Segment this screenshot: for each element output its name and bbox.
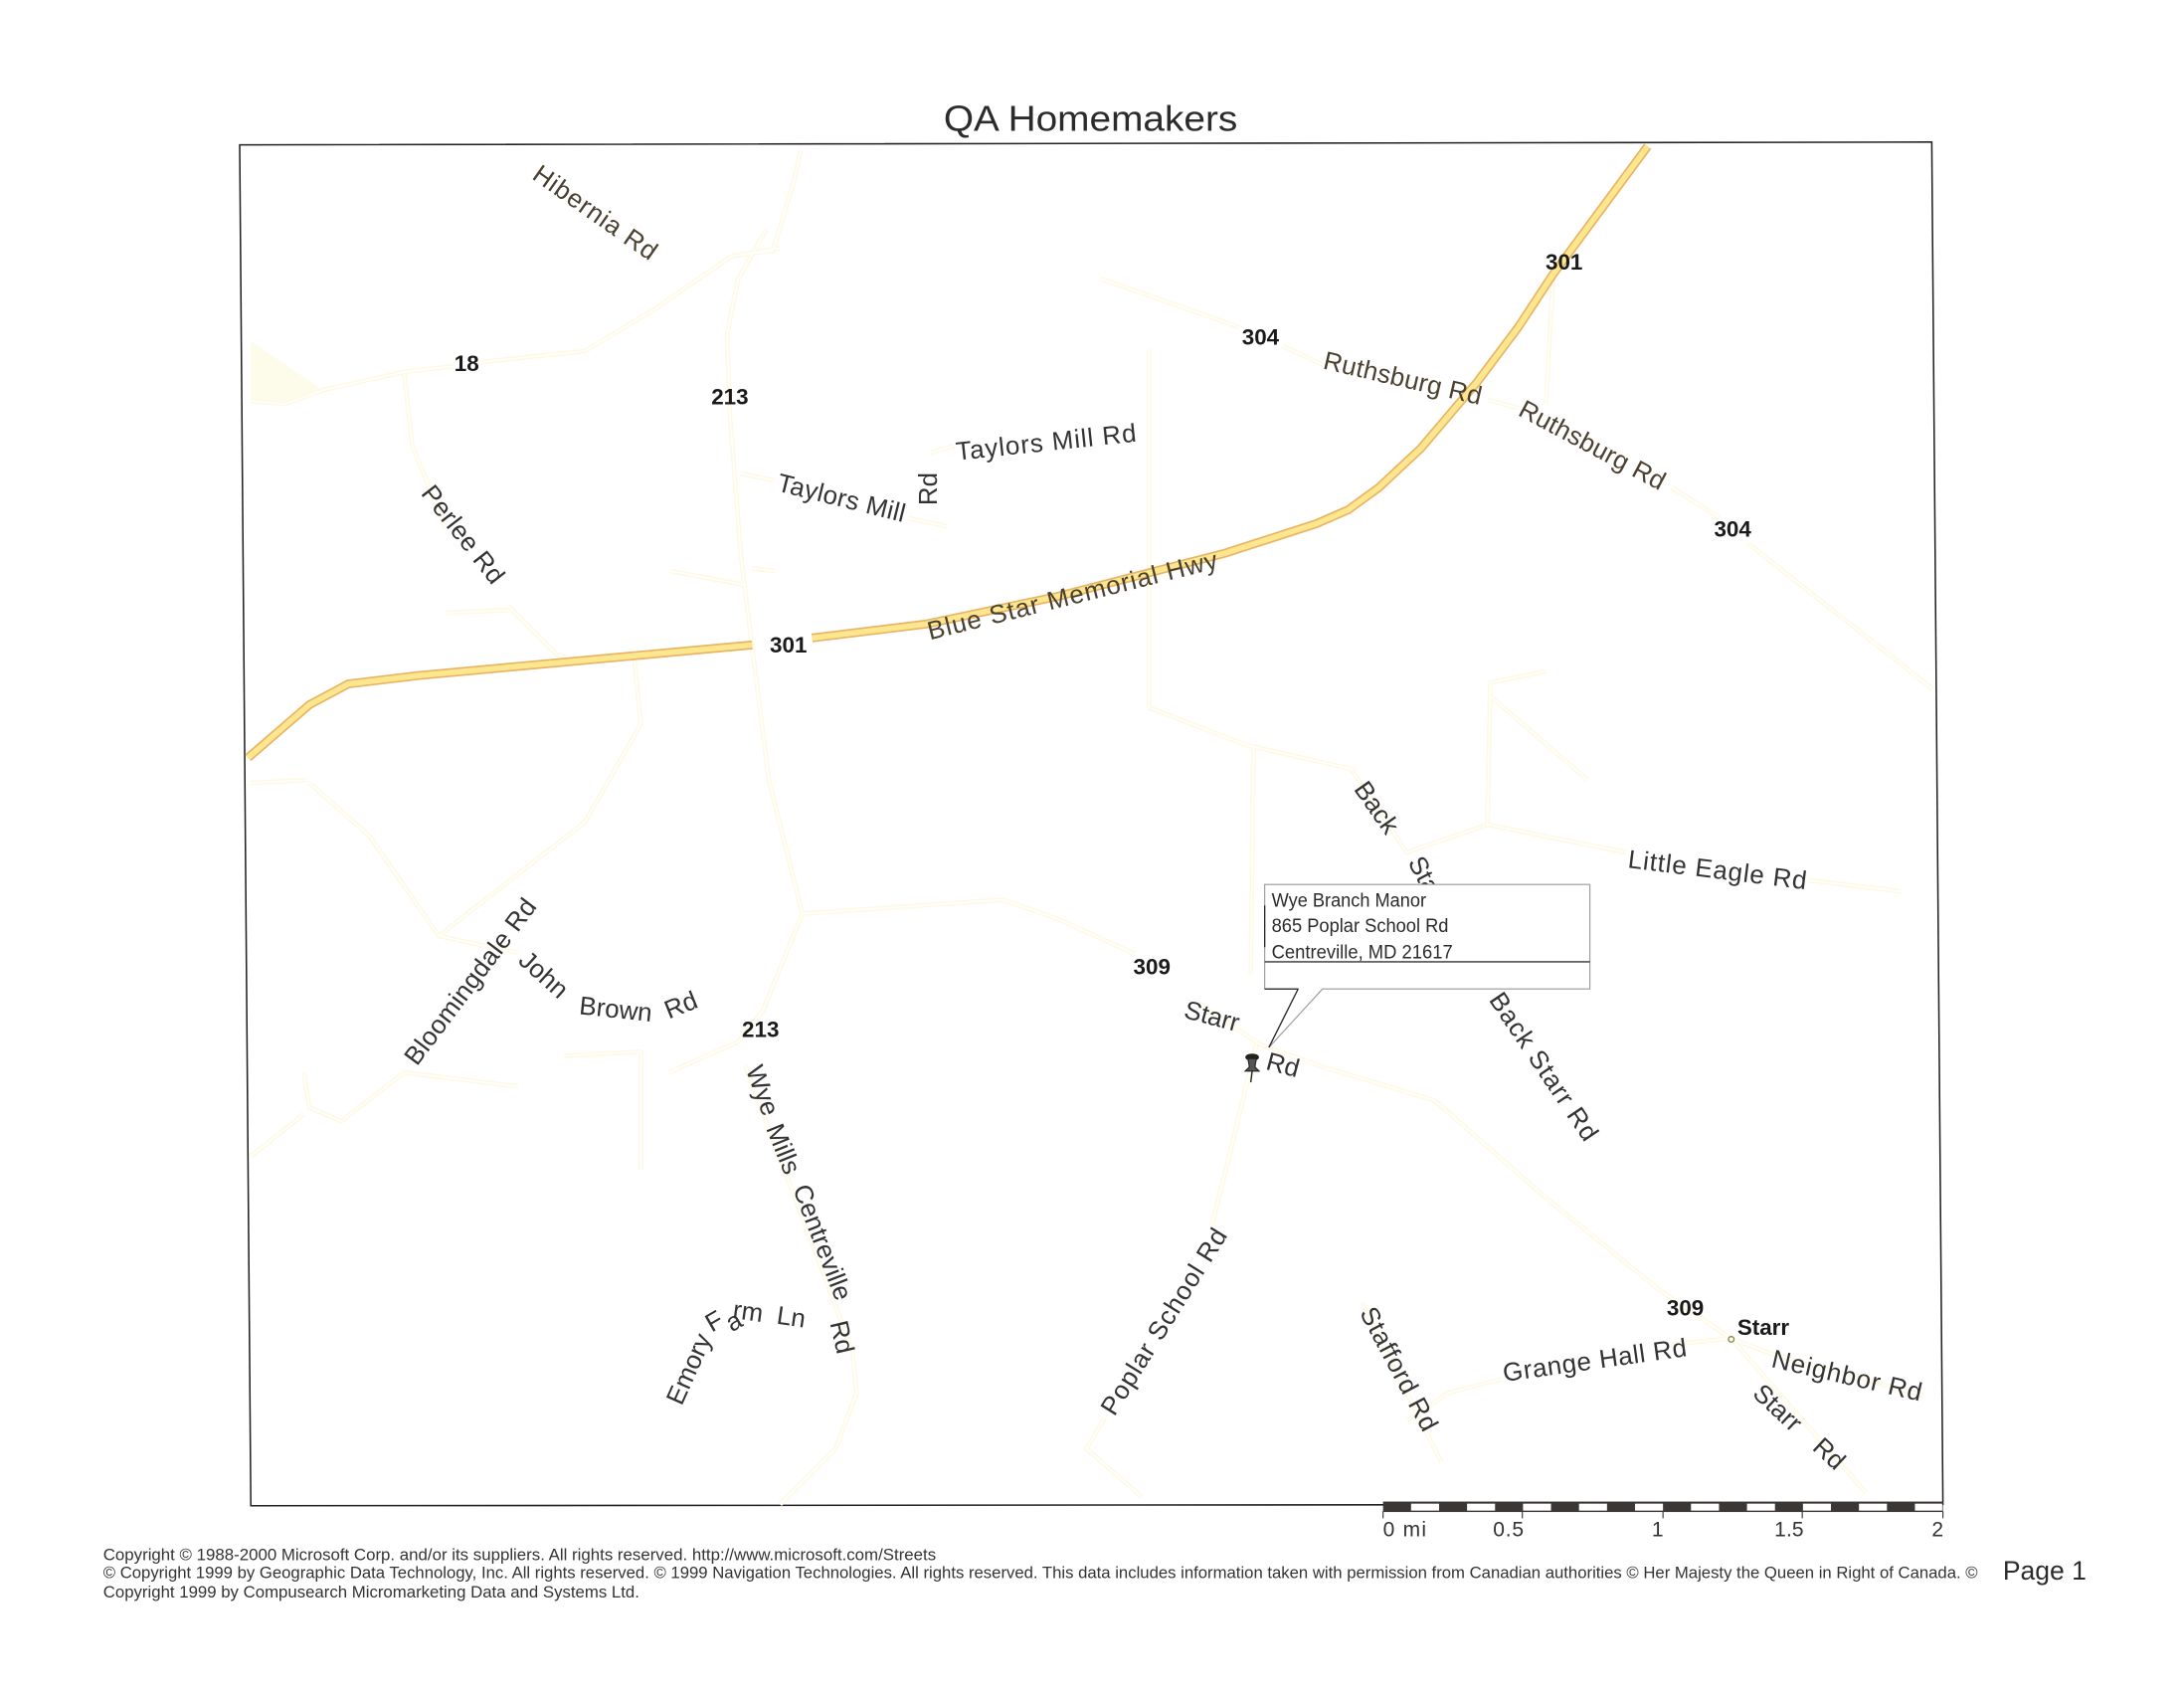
route 213 south: 213 xyxy=(742,1017,779,1041)
road label: Grange Hall Rd: Grange Hall Rd xyxy=(1501,1334,1689,1388)
road label: Taylors Mill: Taylors Mill xyxy=(775,470,908,528)
road label: Emory Farm Ln: rm xyxy=(731,1296,765,1328)
map frame xyxy=(240,142,1943,1506)
road label: Wye Mills Centreville Rd: Centreville xyxy=(787,1181,856,1304)
road label: Neighbor Rd: Neighbor Rd xyxy=(1769,1346,1924,1407)
road label: Wye Mills Centreville Rd: Rd xyxy=(824,1318,858,1357)
road label: Taylors Mill Rd: Taylors Mill Rd xyxy=(955,420,1138,467)
route 213 north: 213 xyxy=(711,385,749,410)
road label: Wye Mills Centreville Rd xyxy=(740,1061,858,1357)
callout: Wye Branch Manor: 865 Poplar School Rd xyxy=(1272,915,1448,937)
copyright notice: Copyright © 1988-2000 Microsoft Corp. and/or its suppliers. All rights reserved. http://www.microsoft.com/Streets xyxy=(103,1545,936,1564)
road label: Brown: Brown xyxy=(578,992,653,1028)
copyright notice: Copyright 1999 by Compusearch Micromarketing Data and Systems Ltd. xyxy=(103,1583,639,1601)
road label: Starr behind callout: Starr xyxy=(1402,851,1453,914)
route 304: 304 xyxy=(1242,324,1280,349)
road label: Rd vertical: Rd xyxy=(915,472,943,505)
road label: Starr: Starr xyxy=(1182,996,1243,1037)
road label: Bloomingdale Rd: Bloomingdale Rd xyxy=(400,893,542,1070)
highway 301 xyxy=(248,146,1648,758)
scale bar: 1 xyxy=(1652,1519,1664,1542)
scale bar: 2 xyxy=(1931,1519,1943,1542)
road label: Ruthsburg Rd west: Ruthsburg Rd xyxy=(1321,347,1485,411)
road label: Wye Mills Centreville Rd: Wye xyxy=(740,1061,784,1119)
road label: Emory Farm Ln: Ln xyxy=(775,1302,808,1334)
road label: Wye Mills Centreville Rd: Mills xyxy=(760,1120,806,1179)
scale bar: 0 mi xyxy=(1383,1519,1426,1542)
callout: Wye Branch Manor: Centreville, MD 21617 xyxy=(1272,941,1453,963)
road label: Rd: Rd xyxy=(1807,1432,1850,1475)
road label: Perlee Rd: Perlee Rd xyxy=(416,480,509,590)
callout: Wye Branch Manor: Wye Branch Manor xyxy=(1272,890,1427,912)
road label: Back: Back xyxy=(1349,777,1404,840)
route 309: 309 xyxy=(1134,954,1171,979)
scale bar: 0.5 xyxy=(1493,1519,1524,1542)
road label: Emory Farm Ln: Emory xyxy=(661,1330,717,1409)
road label: Starr: Starr xyxy=(1747,1379,1807,1437)
copyright notice: © Copyright 1999 by Geographic Data Technology, Inc. All rights reserved. © 1999 Navigation Technologies. All rights reserved. This data includes information taken with permission from Canadian authorities © Her Majesty the Queen in Right of Canada. © xyxy=(103,1564,1978,1583)
road label: Emory Farm Ln: a xyxy=(721,1306,748,1338)
road label: Little Eagle Rd: Little Eagle Rd xyxy=(1626,846,1808,895)
road label: John: John xyxy=(513,946,574,1004)
route 18: 18 xyxy=(455,351,479,376)
title: QA Homemakers xyxy=(944,98,1237,139)
road label: Ruthsburg Rd east: Ruthsburg Rd xyxy=(1514,396,1670,496)
scale bar xyxy=(1383,1502,1943,1542)
icon: place marker xyxy=(1729,1337,1734,1342)
water wedge xyxy=(251,341,323,401)
route 301 west: 301 xyxy=(770,633,807,658)
road label: Rd: Rd xyxy=(660,987,701,1025)
road label: Poplar School Rd: Poplar School Rd xyxy=(1096,1223,1233,1420)
road label: Blue Star Memorial Hwy: Blue Star Memorial Hwy xyxy=(925,546,1220,646)
page number: Page 1 xyxy=(2003,1556,2087,1586)
place label: Starr: Starr xyxy=(1737,1315,1789,1340)
road label: Stafford Rd: Stafford Rd xyxy=(1354,1302,1443,1436)
minor roads xyxy=(251,150,1933,1504)
scale bar: 1.5 xyxy=(1774,1519,1804,1542)
road label: Rd: Rd xyxy=(1263,1047,1302,1083)
callout: Wye Branch Manor xyxy=(1265,884,1590,1047)
route 304 east: 304 xyxy=(1714,517,1751,542)
route 309 east: 309 xyxy=(1667,1295,1704,1320)
road label: Emory Farm Ln xyxy=(661,1296,808,1409)
road label: Back Starr Rd: Back Starr Rd xyxy=(1484,988,1603,1146)
road label: Hibernia Rd: Hibernia Rd xyxy=(527,160,662,266)
route 301 north: 301 xyxy=(1546,250,1582,275)
icon: pushpin xyxy=(1245,1054,1259,1082)
road label: Emory Farm Ln: F xyxy=(701,1306,728,1338)
copyright notice xyxy=(103,1545,1978,1601)
